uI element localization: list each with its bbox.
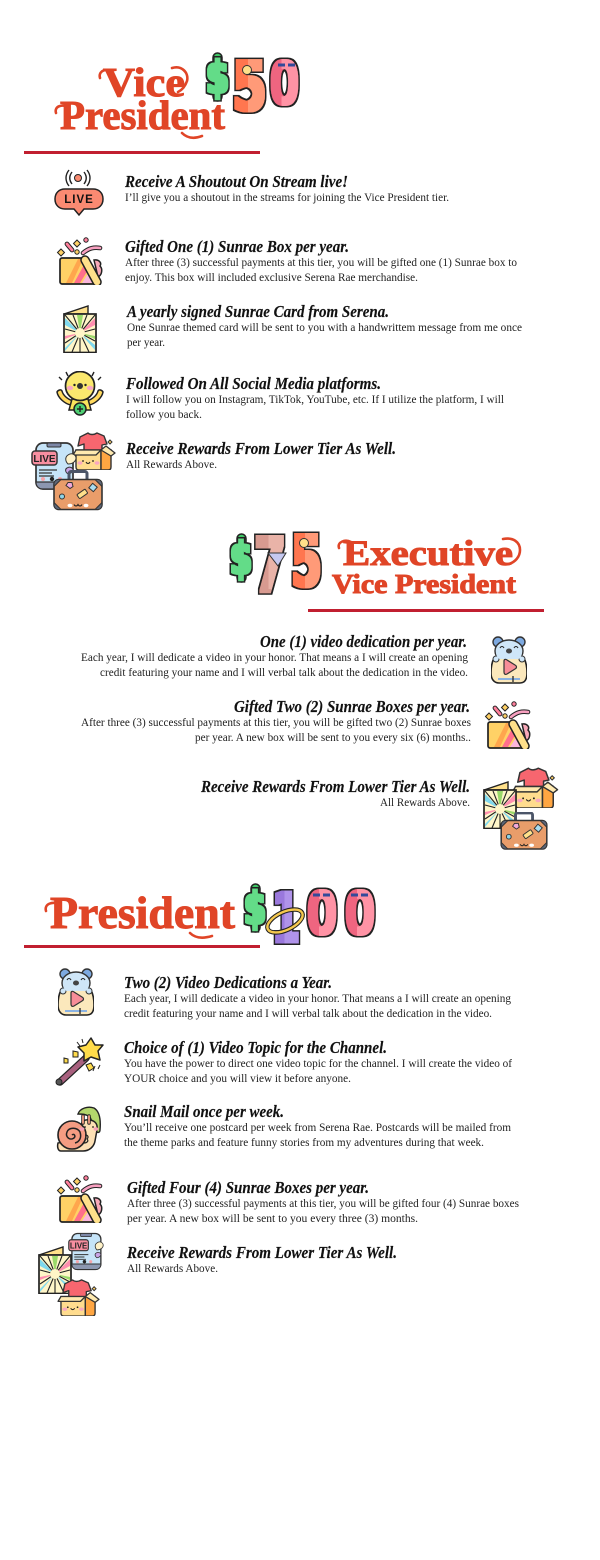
benefit: snail mail [124, 1102, 512, 1149]
benefit: two sunrae boxes: Gifted Two (2) Sunrae Boxes per year. [234, 697, 470, 716]
benefit: one video dedication [81, 632, 468, 679]
benefit: video topic: You have the power to direct one video topic for the channel. I will create the video of [124, 1056, 512, 1070]
benefit: lower tier rewards [126, 1243, 397, 1275]
benefit: one sunrae box: After three (3) successful payments at this tier, you will be gifted one (1) Sunrae box to [125, 255, 517, 269]
heading text: Executive: Executive [343, 533, 513, 573]
benefit: snail mail: the theme parks and feature funny stories from my adventures during that week. [124, 1135, 484, 1149]
benefit: followed on social: I will follow you on Instagram, TikTok, YouTube, etc. If I utilize the platform, I will [126, 392, 505, 406]
heading text: President: President [50, 887, 236, 938]
icon: snail [58, 1107, 100, 1151]
price: $50: $ [206, 52, 229, 103]
benefit: video topic [124, 1038, 512, 1085]
benefit: one video dedication: Each year, I will dedicate a video in your honor. That means a I will create an opening [81, 650, 468, 664]
icon: lower tier rewards group [484, 768, 558, 849]
heading text: Vice President: Vice President [332, 569, 516, 599]
benefit: two sunrae boxes [81, 697, 471, 744]
heading text: President: President [60, 92, 225, 138]
benefit: signed card [126, 302, 522, 349]
price: $50: 0 [270, 49, 299, 118]
price: $100: 0 [307, 879, 337, 948]
benefit: one sunrae box: Gifted One (1) Sunrae Box per year. [125, 237, 349, 256]
icon: chick [57, 372, 103, 415]
benefit: two video dedications [124, 973, 511, 1020]
benefit: signed card: A yearly signed Sunrae Card from Serena. [126, 302, 389, 321]
price: $100: $ [244, 883, 266, 934]
icon: bear video [58, 969, 94, 1015]
icon: lower tier rewards group [32, 433, 115, 510]
icon: live stream: LIVE [64, 194, 94, 206]
benefit: lower tier rewards: All Rewards Above. [127, 1261, 218, 1275]
price: $75 [230, 521, 322, 610]
icon: live stream [55, 170, 103, 215]
benefit: lower tier rewards: Receive Rewards From Lower Tier As Well. [125, 439, 396, 458]
benefit: four sunrae boxes [127, 1178, 519, 1225]
heading: Executive Vice President $75 [230, 521, 520, 610]
benefit: two video dedications: credit featuring your name and I will verbal talk about the dedication in the video. [124, 1006, 492, 1020]
benefit: four sunrae boxes: Gifted Four (4) Sunrae Boxes per year. [127, 1178, 369, 1197]
benefit: four sunrae boxes: per year. A new box will be sent to you every three (3) months. [127, 1211, 418, 1225]
price: $100 [244, 879, 375, 959]
price: $100: 1 [272, 879, 300, 959]
divider: section one [24, 151, 260, 154]
benefit: two video dedications: Each year, I will dedicate a video in your honor. That means a I will create an opening [124, 991, 511, 1005]
benefit: lower tier rewards: All Rewards Above. [380, 795, 470, 809]
icon: card [64, 306, 96, 352]
icon: gift box [58, 238, 102, 284]
price: $75: 5 [291, 521, 322, 603]
benefit: one sunrae box [125, 237, 517, 284]
benefit: shoutout: Receive A Shoutout On Stream live! [124, 172, 348, 191]
benefit: lower tier rewards: Receive Rewards From Lower Tier As Well. [200, 777, 470, 796]
heading: President $100 [46, 879, 375, 959]
benefit: two sunrae boxes: per year. A new box will be sent to you every six (6) months.. [195, 730, 471, 744]
benefit: shoutout: I’ll give you a shoutout in the streams for joining the Vice President tier. [125, 190, 449, 204]
benefit: two sunrae boxes: After three (3) successful payments at this tier, you will be gifted two (2) Sunrae boxes [81, 715, 471, 729]
divider: section three [24, 945, 260, 948]
benefit: followed on social [125, 374, 505, 421]
benefit: followed on social: Followed On All Social Media platforms. [125, 374, 381, 393]
benefit: lower tier rewards: Receive Rewards From Lower Tier As Well. [126, 1243, 397, 1262]
price: $50: 5 [232, 48, 267, 127]
price: $75: $ [230, 533, 252, 584]
icon: bear video [491, 637, 527, 683]
benefit: two video dedications: Two (2) Video Dedications a Year. [124, 973, 332, 992]
benefit: video topic: YOUR choice and you will view it before anyone. [124, 1071, 351, 1085]
benefit: one video dedication: credit featuring your name and I will verbal talk about the dedication in the video. [100, 665, 468, 679]
benefit: lower tier rewards [125, 439, 396, 471]
benefit: snail mail: You’ll receive one postcard per week from Serena Rae. Postcards will be mailed from [124, 1120, 512, 1134]
benefit: lower tier rewards [200, 777, 470, 809]
icon: gift box [58, 1176, 102, 1222]
benefit: signed card: per year. [127, 335, 165, 349]
divider: section two [308, 609, 544, 612]
icon: gift box [486, 702, 530, 748]
benefit: one sunrae box: enjoy. This box will included exclusive Serena Rae merchandise. [125, 270, 418, 284]
benefit: shoutout [124, 172, 449, 204]
price: $100: 0 [345, 879, 375, 948]
benefit: video topic: Choice of (1) Video Topic for the Channel. [124, 1038, 387, 1057]
price: $50 [206, 48, 299, 127]
benefit: one video dedication: One (1) video dedication per year. [260, 632, 467, 651]
icon: lower tier rewards group [39, 1234, 103, 1316]
benefit: lower tier rewards: All Rewards Above. [126, 457, 217, 471]
icon: magic wand [56, 1038, 103, 1085]
benefit: snail mail: Snail Mail once per week. [124, 1102, 284, 1121]
price: $75: 7 [254, 521, 286, 610]
heading: Vice President $50 [56, 48, 299, 138]
benefit: four sunrae boxes: After three (3) successful payments at this tier, you will be gifted four (4) Sunrae boxes [127, 1196, 519, 1210]
benefit: followed on social: follow you back. [126, 407, 202, 421]
benefit: signed card: One Sunrae themed card will be sent to you with a handwrittem message from me once [127, 320, 522, 334]
heading text: Vice: Vice [103, 59, 185, 105]
